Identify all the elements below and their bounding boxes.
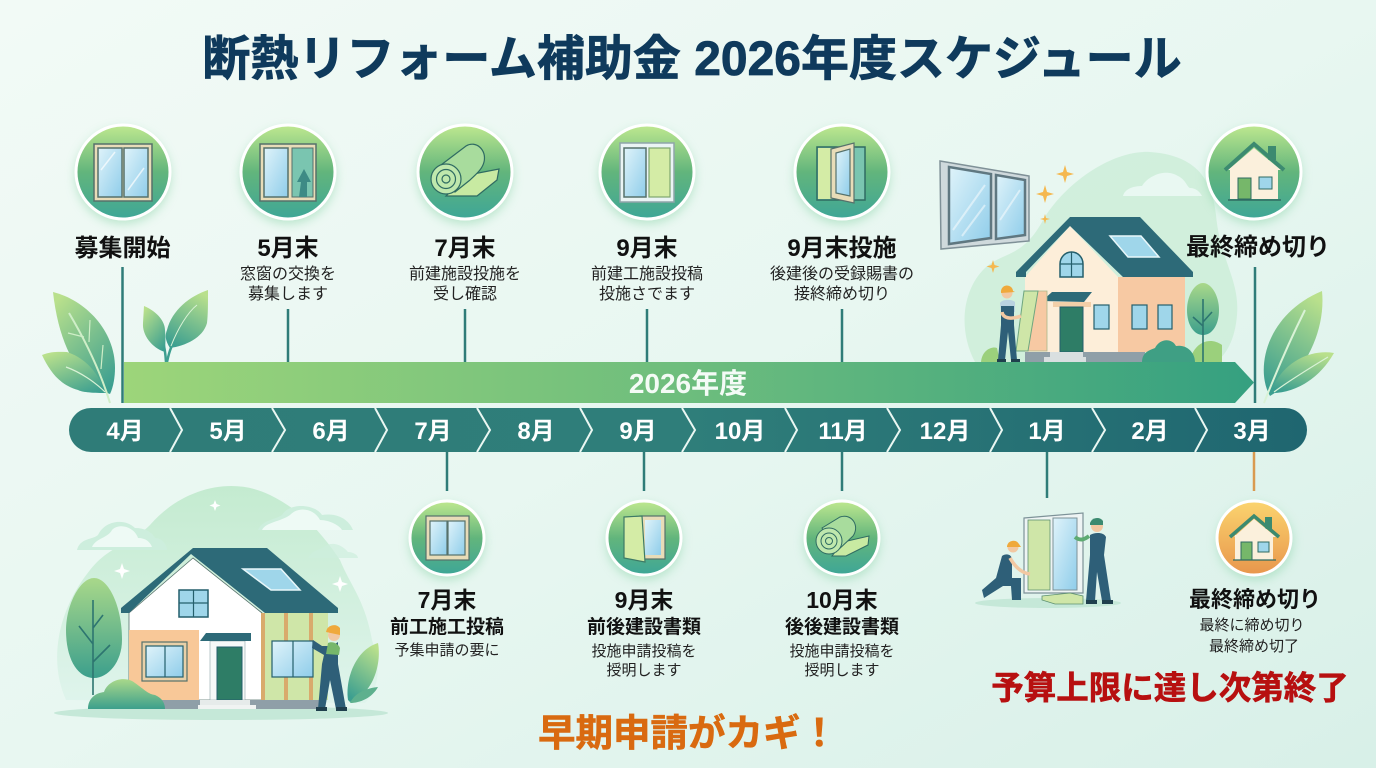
- milestone: 9月末投施: 接終締め切り: [794, 285, 890, 303]
- fiscal year arrow bar: [124, 362, 1254, 403]
- milestone: 7月末: [409, 125, 521, 303]
- milestone: 10月末 後後建設書類: 授明します: [804, 662, 880, 679]
- title: 断熱リフォーム補助金 2026年度スケジュール: [202, 33, 1182, 86]
- illustration: house under renovation (bottom left): [54, 486, 388, 720]
- milestone: 最終締め切り (top): [1186, 125, 1330, 261]
- milestone: 10月末 後後建設書類: 後後建設書類: [785, 615, 899, 638]
- milestone: 9月末投施: [770, 125, 914, 303]
- illustration: workers installing a window: [975, 513, 1121, 608]
- month timeline bar: 11月: [818, 418, 868, 445]
- month timeline bar: 1月: [1028, 418, 1066, 445]
- milestone: 7月末 前工施工投稿: [390, 501, 504, 659]
- milestone: 9月末: 投施さでます: [599, 285, 695, 303]
- milestone: 最終締め切り (top): 最終締め切り: [1186, 234, 1330, 261]
- milestone: 9月末: [591, 125, 703, 303]
- milestone: 9月末 前後建設書類: 前後建設書類: [587, 615, 701, 638]
- milestone: 最終締め切り (bottom, orange): 最終締め切り: [1189, 587, 1321, 612]
- month timeline bar: 7月: [414, 418, 452, 445]
- month timeline bar: 12月: [920, 418, 970, 445]
- milestone: 7月末 前工施工投稿: 予集申請の要に: [394, 642, 500, 659]
- milestone: 9月末 前後建設書類: 9月末: [615, 587, 673, 613]
- callout: budget limit: 予算上限に達し次第終了: [991, 670, 1349, 706]
- icon: double sliding window: [76, 125, 170, 219]
- illustration: right leaves: [1264, 291, 1334, 403]
- icon: window with insulation door: [607, 501, 681, 575]
- milestone: 9月末 前後建設書類: [587, 501, 701, 679]
- month timeline bar: 8月: [517, 418, 555, 445]
- icon: insulation roll: [805, 501, 879, 575]
- icon: window with insulation pane: [600, 125, 694, 219]
- milestone: 5月末: [240, 125, 336, 303]
- milestone: 最終締め切り (bottom, orange): 最終締め切了: [1209, 638, 1299, 655]
- illustration: left leaves: [42, 292, 115, 403]
- stem lines from the timeline (bottom): [447, 452, 1254, 498]
- callout: early application: 早期申請がカギ！: [538, 712, 838, 754]
- milestone: 9月末投施: 9月末投施: [787, 235, 897, 262]
- month timeline bar: 9月: [619, 418, 657, 445]
- icon: house: [1207, 125, 1301, 219]
- illustration: house with window and worker (top right): [940, 152, 1237, 362]
- fiscal year arrow bar: 2026年度: [629, 368, 747, 399]
- milestone: 9月末: 9月末: [616, 235, 678, 262]
- icon: window with arrow: [241, 125, 335, 219]
- milestone: 7月末 前工施工投稿: 前工施工投稿: [390, 616, 504, 638]
- milestone: 7月末: 7月末: [434, 235, 496, 262]
- icon: house on orange: [1217, 501, 1291, 575]
- milestone: 10月末 後後建設書類: [785, 501, 899, 679]
- milestone: 10月末 後後建設書類: 投施申請投稿を: [789, 643, 895, 660]
- month timeline bar: 6月: [312, 418, 350, 445]
- illustration: sprout: [143, 290, 208, 362]
- milestone: 最終締め切り (bottom, orange): [1189, 501, 1321, 655]
- milestone: 5月末: 窓窗の交換を: [240, 265, 336, 283]
- milestone: 9月末: 前建工施設投稿: [591, 265, 703, 283]
- milestone: 7月末 前工施工投稿: 7月末: [418, 587, 476, 613]
- month timeline bar: 10月: [715, 418, 765, 445]
- milestone: 10月末 後後建設書類: 10月末: [806, 587, 878, 613]
- icon: window: [410, 501, 484, 575]
- icon: open window: [795, 125, 889, 219]
- milestone: 9月末投施: 後建後の受録賜書の: [770, 265, 914, 283]
- icon: insulation roll: [418, 125, 512, 219]
- milestone: 最終締め切り (bottom, orange): 最終に締め切り: [1199, 617, 1305, 634]
- stem lines to the timeline (top): [122, 267, 1255, 403]
- month timeline bar: 5月: [209, 418, 247, 445]
- milestone: 5月末: 5月末: [257, 235, 319, 262]
- month timeline bar: [69, 408, 1307, 452]
- milestone: 募集開始: [74, 125, 171, 262]
- milestone: 9月末 前後建設書類: 授明します: [606, 662, 682, 679]
- milestone: 9月末 前後建設書類: 投施申請投稿を: [591, 643, 697, 660]
- month timeline bar: 4月: [106, 418, 144, 445]
- milestone: 募集開始: 募集開始: [74, 235, 170, 262]
- milestone: 7月末: 前建施設投施を: [409, 265, 521, 283]
- milestone: 5月末: 募集します: [248, 285, 328, 303]
- month timeline bar: 3月: [1233, 418, 1271, 445]
- milestone: 7月末: 受し確認: [433, 285, 497, 303]
- month timeline bar: 2月: [1131, 418, 1169, 445]
